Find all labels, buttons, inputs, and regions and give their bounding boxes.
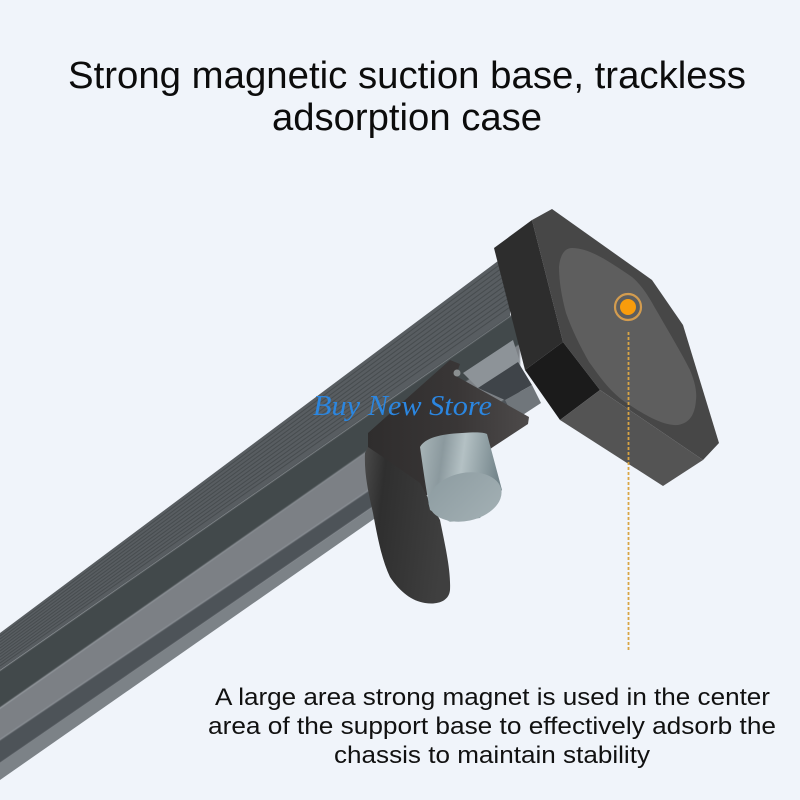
rail: grey section beside bracket [505, 385, 541, 420]
rail: dark section beside bracket [478, 362, 532, 400]
description text: chassis to maintain stability [334, 742, 650, 769]
watermark: Buy New Store [313, 391, 492, 422]
head: magnet disc [559, 248, 696, 425]
description text: A large area strong magnet is used in the center [215, 684, 770, 711]
head: lower side face [560, 390, 703, 486]
rail: light band [0, 344, 520, 760]
bracket: cylinder magnet [420, 432, 506, 528]
magnetic base head [494, 209, 719, 486]
title: adsorption case [272, 97, 542, 139]
bracket: top plate [368, 360, 529, 500]
rail: ribbed top face [0, 252, 510, 670]
slider bracket [365, 360, 529, 603]
head: left side face [494, 220, 563, 370]
bracket: hanging tab [365, 447, 450, 603]
title [68, 55, 746, 139]
head: front face [532, 209, 719, 460]
title: Strong magnetic suction base, trackless [68, 55, 746, 97]
description text [208, 684, 776, 769]
support rail [0, 252, 541, 784]
rail: lower dark groove [0, 388, 520, 784]
description text: area of the support base to effectively adsorb the [208, 713, 776, 740]
rail: light strip beside bracket [463, 340, 520, 388]
rail: dark channel [0, 309, 520, 729]
bracket: rivet [454, 370, 460, 376]
rail: lower light edge [0, 406, 520, 780]
head: dark notch [525, 342, 600, 420]
callout marker dot [615, 294, 641, 320]
dotted leader line [628, 332, 630, 652]
